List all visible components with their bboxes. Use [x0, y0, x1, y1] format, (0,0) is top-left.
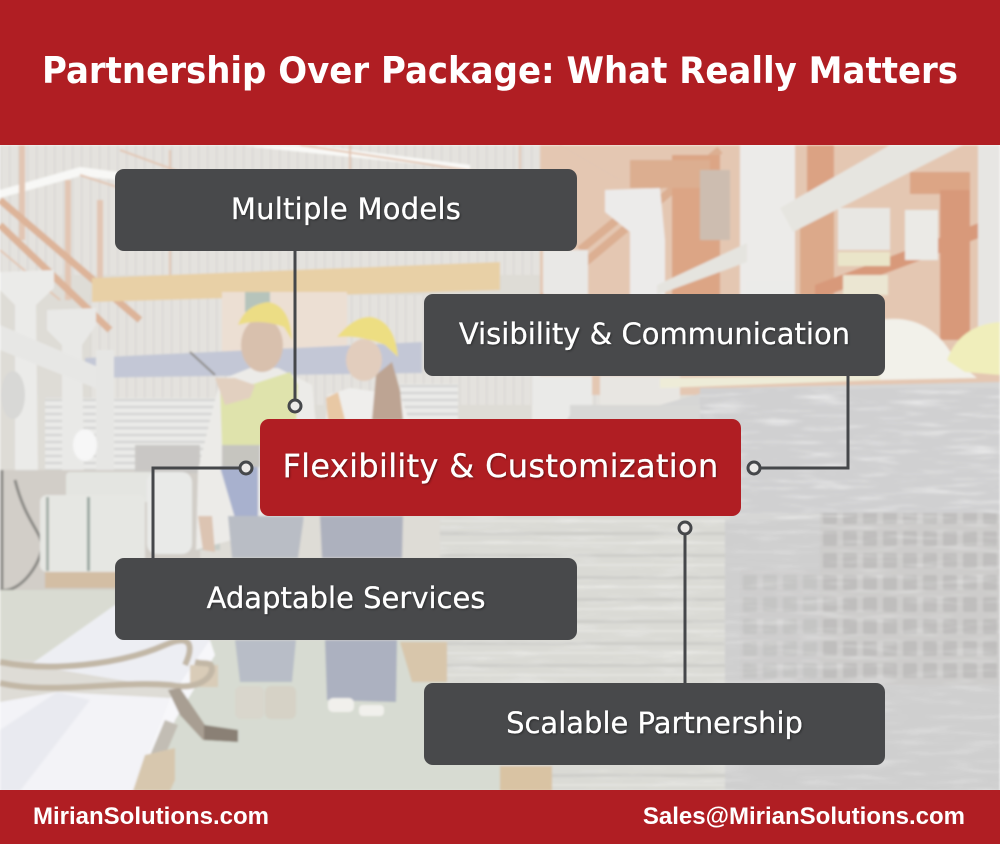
mid-left machinery: [0, 470, 200, 605]
upper walls and roof: [0, 145, 1000, 791]
wooden blocks: [133, 748, 175, 791]
man: [196, 368, 316, 550]
box: Scalable Partnership: [424, 683, 885, 765]
footer website: MirianSolutions.com: [33, 803, 269, 830]
footer email: Sales@MirianSolutions.com: [643, 803, 965, 830]
box: Flexibility & Customization: Flexibility & Customization: [282, 447, 719, 485]
floor and pallets in front of the stack: [400, 682, 552, 791]
pale concrete columns left: [0, 270, 54, 480]
box: Scalable Partnership: Scalable Partnership: [506, 706, 803, 740]
white concrete columns right: [740, 145, 795, 305]
white roofing sheets: [30, 605, 210, 690]
skylights: [0, 167, 118, 198]
box: Multiple Models: Multiple Models: [231, 192, 461, 226]
louvres: [45, 398, 215, 470]
windows: [838, 208, 890, 250]
orange roof trusses: [0, 145, 720, 330]
box: Multiple Models: [115, 169, 577, 251]
helmets on stack: [880, 319, 977, 380]
background photo: warehouse with two workers: [0, 145, 1000, 790]
stretch wrapped stack: [440, 382, 1000, 791]
box: Visibility & Communication: [424, 294, 885, 376]
footer band: [0, 790, 1000, 844]
slings: [0, 641, 212, 688]
box: Adaptable Services: Adaptable Services: [207, 580, 485, 614]
blue band: [85, 342, 422, 378]
woman: [326, 388, 409, 420]
yellow crane beam: [92, 262, 500, 302]
steel coils: [66, 472, 156, 502]
floor: [0, 590, 115, 660]
header band: [0, 0, 1000, 145]
box: Flexibility & Customization: [260, 419, 741, 516]
title: Partnership Over Package: What Really Matters: [42, 49, 958, 93]
box: Adaptable Services: [115, 558, 577, 640]
orange steel columns right: [672, 155, 720, 305]
box: Visibility & Communication: Visibility & Communication: [459, 316, 850, 350]
